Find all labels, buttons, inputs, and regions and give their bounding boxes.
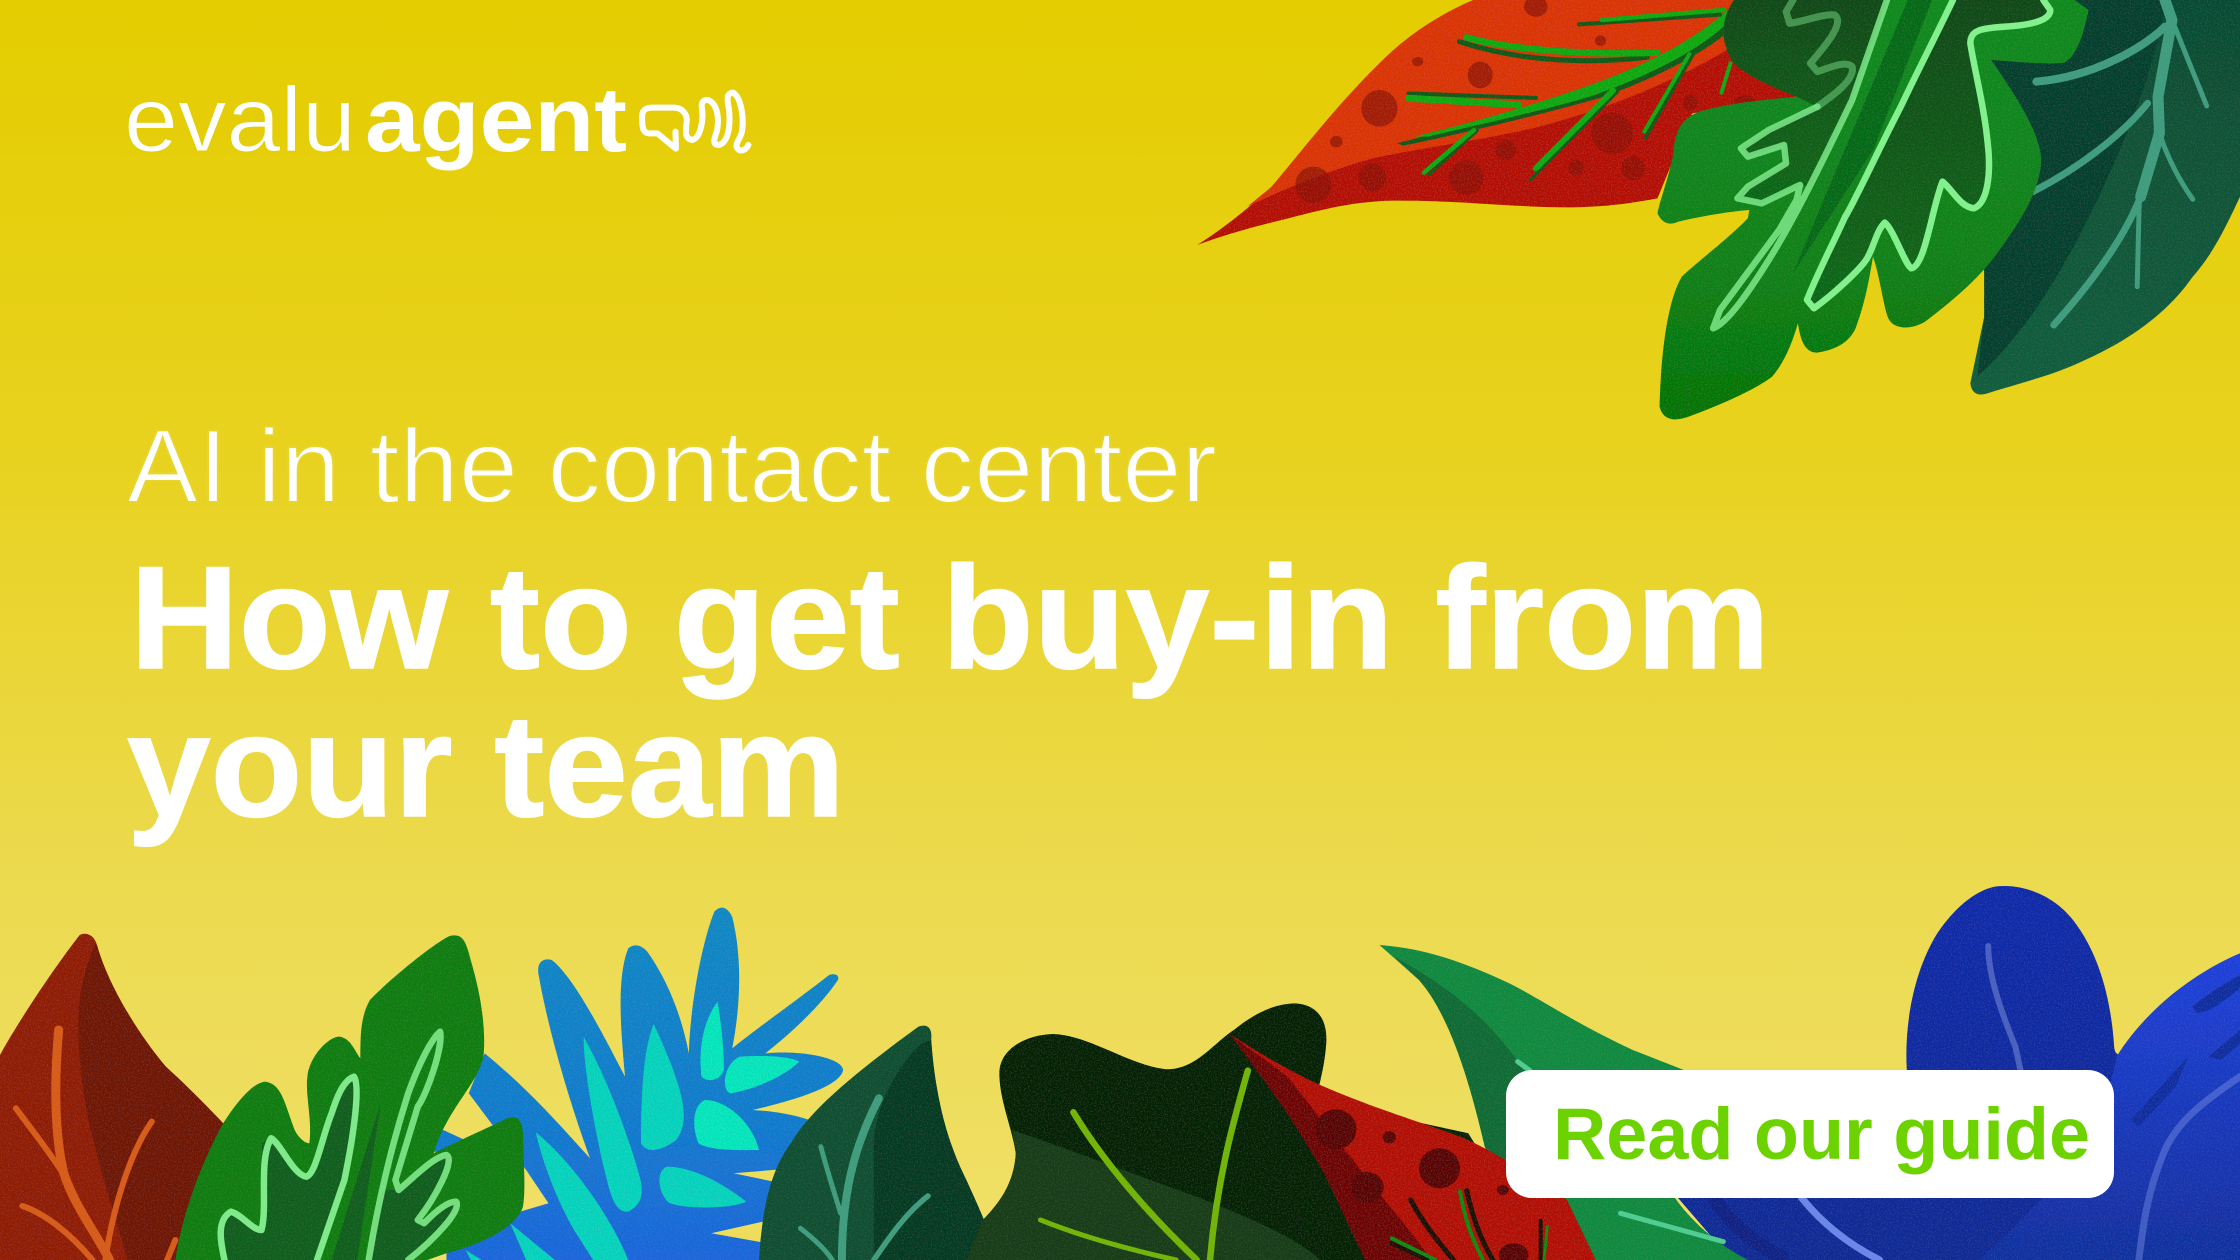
leaf: blue pair [1674, 886, 2240, 1260]
button: read our guide: Read our guide [1553, 1094, 2090, 1175]
button: read our guide [1506, 1070, 2114, 1198]
logo: evaluagent [124, 69, 748, 171]
leaf: mid green [1379, 945, 1748, 1260]
subtitle: AI in the contact center [127, 409, 1217, 525]
logo wordmark: agent [365, 69, 627, 171]
logo icon: speech bubble with wave [642, 93, 748, 151]
leaf: red-orange with dots [1197, 0, 1797, 245]
leaf: dark teal [1970, 0, 2240, 395]
leaf: red with dots [1230, 1034, 1596, 1260]
leaf cluster: bottom right [966, 886, 2240, 1260]
headline: your team [127, 684, 845, 847]
leaf: green with light veins [175, 935, 524, 1260]
headline: How to get buy-in from [130, 536, 1770, 699]
logo wordmark: evalu [124, 69, 356, 171]
leaf: bright green with light veins [1657, 0, 2089, 419]
leaf cluster: bottom left [0, 908, 1000, 1260]
leaf cluster: top right [1197, 0, 2240, 419]
leaf: dark red [0, 934, 230, 1260]
headline [127, 536, 1770, 847]
plant: blue spiky with teal shards [434, 908, 843, 1260]
leaf: near-black green [966, 1003, 1477, 1260]
leaf: dark green [759, 1026, 1000, 1260]
